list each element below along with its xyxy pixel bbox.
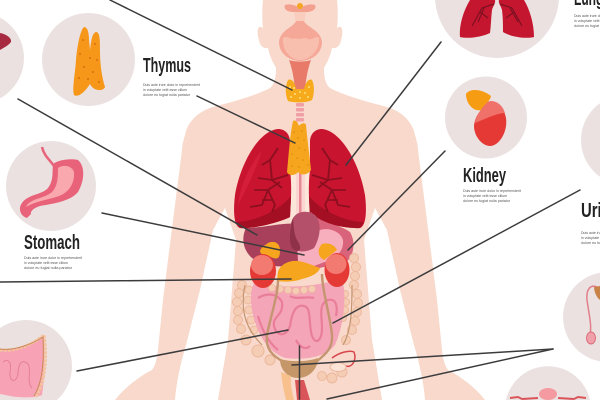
adrenal glands xyxy=(260,242,337,260)
circle: kidney icon xyxy=(445,76,527,158)
fallopian tube xyxy=(330,351,355,372)
circle: intestine icon xyxy=(0,320,72,400)
lungs xyxy=(234,129,366,228)
circle: female reproductive icon xyxy=(506,366,590,400)
thyroid gland xyxy=(286,80,314,102)
circle: lungs icon xyxy=(435,0,559,58)
small intestine xyxy=(251,278,344,359)
pancreas xyxy=(277,261,320,282)
heading: Stomach: Stomach xyxy=(24,232,80,254)
caption: Thymus: in voluptate velit esse cillum xyxy=(143,87,188,92)
bladder xyxy=(280,358,318,378)
trachea xyxy=(296,103,304,122)
liver xyxy=(243,224,298,266)
caption: Kidney: in voluptate velit esse cillum xyxy=(463,193,508,198)
circle: male reproductive icon xyxy=(563,272,600,362)
caption: Stomach: dolore eu fugiat nulla pariatur xyxy=(24,265,73,270)
kidneys xyxy=(250,253,350,288)
oesophagus xyxy=(296,172,305,216)
body silhouette xyxy=(115,0,485,400)
heart xyxy=(289,212,320,251)
caption: Thymus: dolore eu fugiat nulla pariatur xyxy=(143,92,191,97)
heading: Kidney: Kidney xyxy=(463,165,507,187)
colon xyxy=(232,254,362,383)
circle: thymus icon xyxy=(42,13,135,106)
throat and oral cavity xyxy=(279,3,322,90)
circle: urinary icon xyxy=(581,95,600,185)
caption: Kidney: Duis aute irure dolor in reprehenderit xyxy=(463,188,522,193)
thymus gland xyxy=(287,120,311,175)
circle: liver icon xyxy=(0,12,24,104)
stomach xyxy=(296,212,353,272)
ureters xyxy=(243,274,352,362)
heading: Thymus: Thymus xyxy=(143,55,191,77)
urethra and rectum xyxy=(281,372,310,400)
caption: Stomach: Duis aute irure dolor in reprehenderit xyxy=(24,255,83,260)
circle: stomach icon xyxy=(6,141,96,231)
caption: Stomach: in voluptate velit esse cillum xyxy=(24,260,69,265)
caption: Thymus: Duis aute irure dolor in reprehenderit xyxy=(143,82,201,87)
caption: Kidney: dolore eu fugiat nulla pariatur xyxy=(463,198,511,203)
